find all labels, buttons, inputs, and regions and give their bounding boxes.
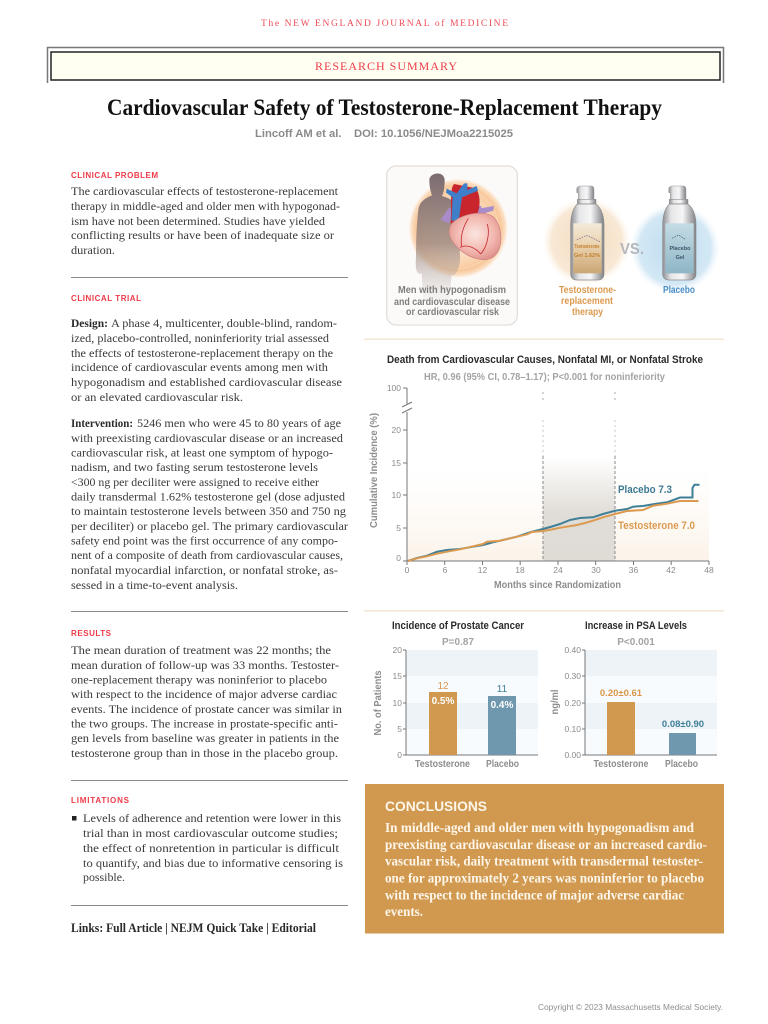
label: versus: VS. bbox=[620, 241, 644, 258]
icon: man silhouette bbox=[416, 173, 460, 300]
text block: intervention: sessed in a time-to-event analysis. bbox=[71, 578, 238, 592]
label: placebo 7.3: Placebo 7.3 bbox=[618, 484, 672, 496]
x axis: 24 bbox=[553, 565, 563, 575]
y axis: 20 bbox=[392, 425, 401, 435]
bar: testosterone bbox=[594, 688, 649, 770]
links: Links: Full Article | NEJM Quick Take | Editorial bbox=[71, 921, 316, 935]
p value: P=0.87 bbox=[442, 637, 474, 648]
label: testosterone-replacement therapy: replacement bbox=[561, 296, 614, 307]
text block: results: with respect to the incidence of major adverse cardiac bbox=[71, 687, 337, 701]
heading: clinical problem: CLINICAL PROBLEM bbox=[71, 171, 158, 180]
bar: testosterone: 0.5% bbox=[432, 696, 455, 707]
x axis: 6 bbox=[443, 565, 448, 575]
text block: design: the effects of testosterone-replacement therapy on the bbox=[71, 346, 333, 360]
label: testosterone-replacement therapy: therapy bbox=[572, 307, 603, 318]
panel: clinical trial bbox=[71, 294, 348, 592]
x axis: 0 bbox=[405, 565, 410, 575]
x axis: 18 bbox=[515, 565, 525, 575]
bar: placebo bbox=[486, 684, 519, 770]
y axis: 15 bbox=[392, 458, 401, 468]
x axis: Months since Randomization bbox=[494, 580, 621, 591]
text block: design: or an elevated cardiovascular risk. bbox=[71, 390, 243, 404]
x axis: 12 bbox=[478, 565, 487, 575]
chart: cumulative incidence curves bbox=[369, 354, 714, 591]
heading: results: RESULTS bbox=[71, 629, 112, 638]
y axis: 15 bbox=[393, 671, 402, 681]
chart title: Death from Cardiovascular Causes, Nonfatal MI, or Nonfatal Stroke bbox=[387, 354, 703, 366]
text block: results bbox=[71, 643, 342, 760]
text block: results: gen levels from baseline was greater in patients in the bbox=[71, 731, 339, 745]
y axis: 0.30 bbox=[564, 671, 581, 681]
text block: limitations: to quantify, and bias due to informative censoring is bbox=[83, 856, 343, 870]
text block: intervention bbox=[71, 416, 348, 592]
x axis: 36 bbox=[629, 565, 638, 575]
chart title: Increase in PSA Levels bbox=[585, 620, 687, 632]
x axis: 48 bbox=[704, 565, 714, 575]
text block: intervention: safety end point was the first occurrence of any compo- bbox=[71, 534, 338, 548]
text block: conclusions: preexisting cardiovascular disease or an increased cardio- bbox=[385, 837, 707, 852]
text block: clinical problem: duration. bbox=[71, 243, 115, 257]
text block: intervention: with preexisting cardiovascular disease or an increased bbox=[71, 431, 343, 445]
text block: results: events. The incidence of prostate cancer was similar in bbox=[71, 702, 342, 716]
text block: intervention: nent of a composite of death from cardiovascular causes, bbox=[71, 548, 343, 562]
y axis: 0 bbox=[397, 750, 402, 760]
text block: limitations: Levels of adherence and retention were lower in this bbox=[83, 811, 341, 825]
banner: research summary bbox=[48, 48, 724, 83]
y axis: No. of Patients bbox=[373, 670, 384, 736]
label: population: or cardiovascular risk bbox=[406, 307, 499, 318]
text block: intervention: daily transdermal 1.62% testosterone gel (dose adjusted bbox=[71, 490, 345, 504]
y axis bbox=[550, 645, 717, 760]
journal masthead: The NEW ENGLAND JOURNAL of MEDICINE bbox=[261, 18, 508, 29]
text block: conclusions: In middle-aged and older men with hypogonadism and bbox=[385, 820, 694, 835]
text block: intervention: 5246 men who were 45 to 80 years of age bbox=[137, 416, 341, 430]
text block: design bbox=[71, 316, 342, 404]
y axis: ng/ml bbox=[550, 689, 561, 714]
chart title: Incidence of Prostate Cancer bbox=[392, 620, 525, 632]
bar: placebo: 0.08±0.90 bbox=[662, 719, 704, 730]
y axis bbox=[373, 645, 538, 760]
text block: conclusions: with respect to the incidence of major adverse cardiac bbox=[385, 888, 684, 902]
heading: limitations: LIMITATIONS bbox=[71, 796, 130, 805]
label: population: and cardiovascular disease bbox=[394, 297, 510, 308]
y axis: 20 bbox=[393, 645, 402, 655]
y axis: 0 bbox=[396, 553, 401, 563]
y axis: 100 bbox=[387, 383, 401, 393]
y axis: 10 bbox=[393, 698, 402, 708]
label: testosterone-replacement therapy: Testosterone- bbox=[559, 285, 616, 296]
text block: intervention: <300 ng per deciliter were assigned to receive either bbox=[71, 475, 319, 489]
text block: results: one-replacement therapy was noninferior to placebo bbox=[71, 672, 327, 686]
y axis: 0.00 bbox=[564, 750, 581, 760]
title: Cardiovascular Safety of Testosterone-Replacement Therapy bbox=[107, 95, 662, 120]
bar: testosterone: Testosterone bbox=[415, 759, 470, 770]
illustration: testosterone gel bottle: Gel 1.62% bbox=[574, 253, 600, 259]
icon: heart bbox=[441, 183, 501, 260]
label: population: Men with hypogonadism bbox=[398, 285, 506, 296]
y axis: 5 bbox=[396, 523, 401, 533]
heading: conclusions: CONCLUSIONS bbox=[385, 798, 487, 814]
banner: research summary: RESEARCH SUMMARY bbox=[315, 59, 457, 73]
text block: clinical problem bbox=[71, 184, 340, 257]
text block: results: The mean duration of treatment was 22 months; the bbox=[71, 643, 331, 657]
illustration: placebo gel bottle: Placebo bbox=[669, 246, 691, 252]
bar: placebo: 11 bbox=[497, 684, 508, 695]
bar: testosterone: 0.20±0.61 bbox=[600, 688, 643, 699]
text block: limitations: possible. bbox=[83, 870, 125, 884]
text block: limitations: trial than in most cardiovascular outcome studies; bbox=[83, 826, 338, 840]
text block: intervention: nadism, and two fasting serum testosterone levels bbox=[71, 460, 318, 474]
bar: testosterone: 12 bbox=[437, 681, 449, 692]
y axis: Cumulative Incidence (%) bbox=[369, 413, 380, 528]
hazard ratio note: HR, 0.96 (95% CI, 0.78–1.17); P<0.001 for noninferiority bbox=[424, 372, 665, 383]
panel: clinical problem bbox=[71, 171, 340, 257]
heading: clinical trial: CLINICAL TRIAL bbox=[71, 294, 141, 303]
curve: testosterone bbox=[408, 501, 698, 561]
illustration: men with hypogonadism panel bbox=[387, 166, 517, 325]
x axis: 30 bbox=[591, 565, 601, 575]
illustration: placebo gel bottle bbox=[630, 186, 720, 293]
panel: limitations bbox=[71, 796, 343, 884]
chart: increase in PSA levels bbox=[550, 620, 717, 770]
text block: limitations bbox=[83, 811, 343, 884]
copyright: Copyright © 2023 Massachusetts Medical Society. bbox=[538, 1002, 723, 1012]
label: testosterone-replacement therapy bbox=[559, 285, 616, 318]
text block: results: mean duration of follow-up was 33 months. Testoster- bbox=[71, 658, 339, 672]
label: population bbox=[394, 285, 510, 318]
text block: design: ized, placebo-controlled, noninferiority trial assessed bbox=[71, 331, 329, 345]
bar: placebo: Placebo bbox=[665, 759, 698, 770]
text block: intervention: to maintain testosterone levels between 350 and 750 ng bbox=[71, 504, 346, 518]
panel: results bbox=[71, 629, 342, 760]
x axis: 42 bbox=[666, 565, 676, 575]
bar: testosterone bbox=[415, 681, 470, 770]
y axis: 0.10 bbox=[564, 724, 581, 734]
y axis: 0.20 bbox=[564, 698, 581, 708]
text block: conclusions: vascular risk, daily treatment with transdermal testoster- bbox=[385, 854, 703, 868]
text block: conclusions bbox=[385, 820, 707, 919]
y axis: 0.40 bbox=[564, 645, 581, 655]
illustration: testosterone gel bottle: Testosterone bbox=[574, 244, 600, 250]
text block: intervention: cardiovascular risk, at least one symptom of hypogo- bbox=[71, 446, 333, 460]
text block: design: hypogonadism and established cardiovascular disease bbox=[71, 375, 342, 389]
bullet bbox=[72, 816, 76, 820]
text block: clinical problem: ism have not been determined. Studies have yielded bbox=[71, 214, 325, 228]
y axis bbox=[369, 383, 412, 563]
y axis: 10 bbox=[392, 490, 401, 500]
bar: placebo: 0.4% bbox=[491, 700, 514, 711]
text block: clinical problem: The cardiovascular effects of testosterone-replacement bbox=[71, 184, 339, 198]
text block: intervention: nonfatal myocardial infarction, or nonfatal stroke, as- bbox=[71, 563, 338, 577]
label: placebo: Placebo bbox=[663, 285, 695, 296]
illustration: testosterone gel bottle bbox=[543, 186, 631, 286]
y axis: 5 bbox=[397, 724, 402, 734]
text block: results: the two groups. The increase in prostate-specific anti- bbox=[71, 716, 338, 730]
text block: design: A phase 4, multicenter, double-blind, random- bbox=[111, 316, 337, 330]
text block: intervention: Intervention: bbox=[71, 416, 133, 430]
text block: conclusions: events. bbox=[385, 904, 423, 919]
chart: incidence of prostate cancer bbox=[373, 620, 538, 770]
text block: conclusions: one for approximately 2 years was noninferior to placebo bbox=[385, 870, 704, 886]
x axis bbox=[405, 561, 714, 591]
label: testosterone 7.0: Testosterone 7.0 bbox=[618, 520, 695, 532]
text block: design: Design: bbox=[71, 316, 108, 330]
p value: P<0.001 bbox=[617, 637, 655, 648]
bar: placebo: Placebo bbox=[486, 759, 519, 770]
text block: clinical problem: conflicting results or have been of inadequate size or bbox=[71, 228, 334, 242]
illustration: placebo gel bottle: Gel bbox=[676, 255, 685, 261]
panel: conclusions bbox=[365, 784, 724, 934]
text block: results: testosterone group than in those in the placebo group. bbox=[71, 746, 338, 760]
bar: testosterone: Testosterone bbox=[594, 759, 649, 770]
bar: placebo bbox=[662, 719, 704, 770]
text block: design: incidence of cardiovascular events among men with bbox=[71, 360, 328, 374]
authors and DOI: Lincoff AM et al. DOI: 10.1056/NEJMoa2215025 bbox=[255, 128, 513, 140]
text block: intervention: per deciliter) or placebo gel. The primary cardiovascular bbox=[71, 519, 348, 533]
text block: limitations: the effect of nonretention in particular is difficult bbox=[83, 841, 340, 855]
curve: placebo bbox=[408, 485, 700, 561]
text block: clinical problem: therapy in middle-aged and older men with hypogonad- bbox=[71, 199, 340, 213]
